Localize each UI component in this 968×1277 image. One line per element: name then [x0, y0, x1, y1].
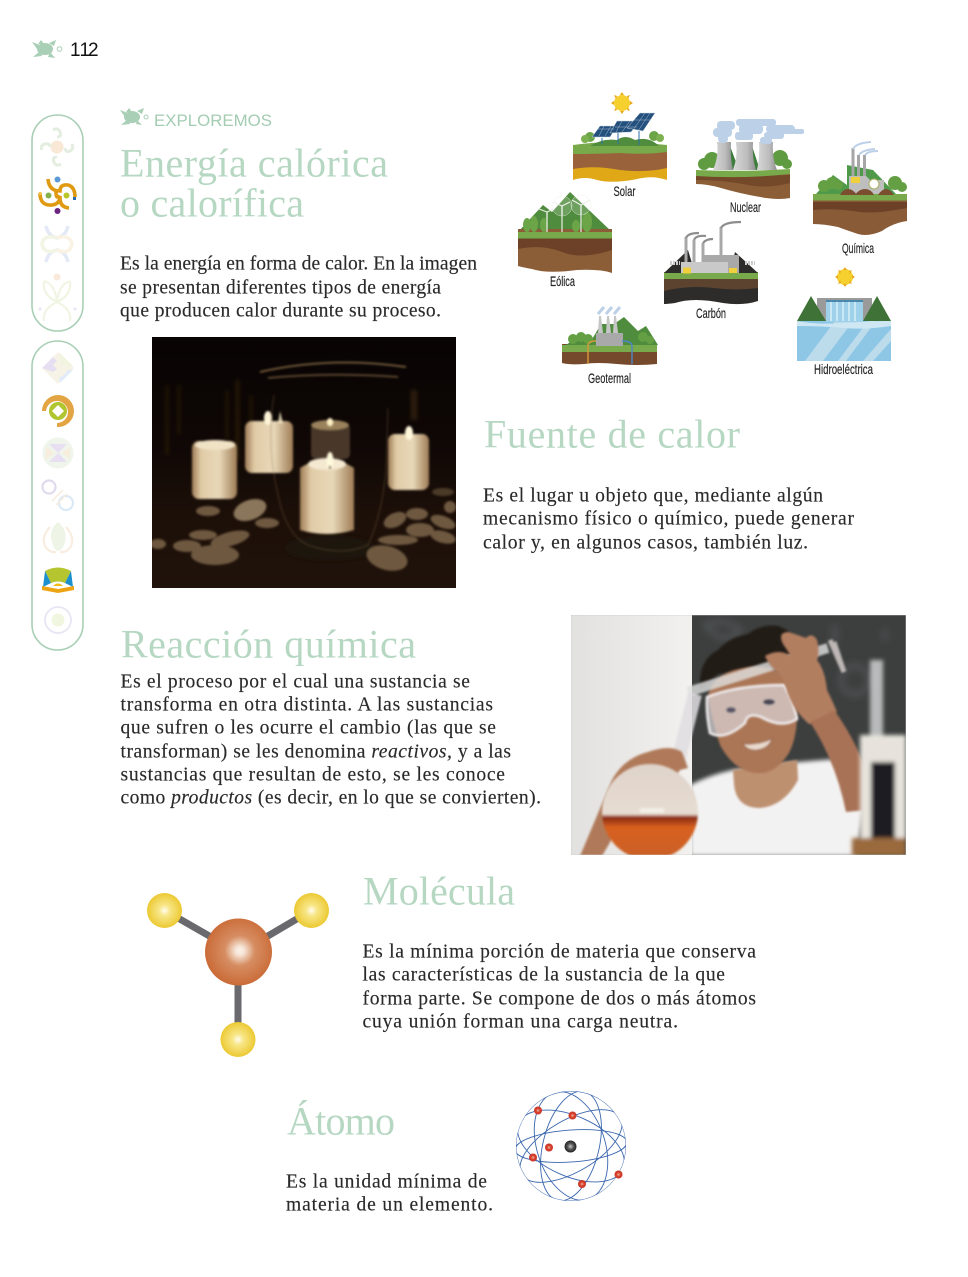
island: solar: Solar — [614, 183, 636, 199]
text block: molécula definition: las características de la sustancia de la que — [362, 964, 725, 986]
text block: reacción definition: como productos (es decir, en lo que se convierten). — [120, 788, 541, 808]
neck — [733, 760, 798, 808]
glass rim — [260, 363, 406, 551]
text block: reacción definition: sustancias que resultan de esto, se les conoce — [120, 764, 505, 786]
island: eólica: Eólica — [550, 273, 575, 289]
heading: molécula: Molécula — [363, 868, 515, 914]
electrons — [529, 1106, 622, 1188]
island: solar — [573, 92, 667, 199]
atom: bottom — [220, 1022, 256, 1057]
section label: exploremos — [120, 108, 272, 130]
face — [708, 667, 797, 773]
icon: colored book fan — [42, 568, 74, 593]
text block: fuente definition: calor y, en algunos casos, también luz. — [483, 532, 808, 554]
atom: top right — [294, 893, 329, 928]
icon: orange ring — [42, 395, 74, 427]
candle: right — [388, 426, 429, 490]
icon: faded leaves — [38, 274, 76, 321]
bonds — [164, 910, 312, 1040]
petals — [150, 488, 457, 575]
text block: energía definition: que producen calor durante su proceso. — [120, 300, 441, 322]
icon: frog — [120, 108, 148, 125]
text block: fuente definition: Es el lugar u objeto que, mediante algún — [483, 486, 823, 506]
sidebar pill: top group — [32, 115, 83, 331]
island: carbón: Carbón — [696, 305, 726, 321]
icon: faded lotus — [44, 522, 72, 552]
text block: reacción definition — [120, 672, 541, 808]
heading: energía calórica: Energía calórica — [120, 140, 388, 186]
text block: átomo definition: Es la unidad mínima de — [286, 1172, 487, 1192]
icon: frog — [32, 40, 62, 58]
central atom — [205, 918, 272, 986]
photo: girl with chemistry flask — [571, 615, 906, 860]
foreground lab glass — [852, 660, 906, 856]
sidebar pill: bottom group — [32, 341, 83, 650]
text block: molécula definition: forma parte. Se compone de dos o más átomos — [362, 988, 756, 1010]
text block: fuente definition — [483, 486, 854, 554]
diagram: energy sources — [518, 92, 907, 386]
heading: reacción química: Reacción química — [121, 622, 416, 666]
island: hidroeléctrica: Hidroeléctrica — [814, 361, 873, 377]
icon: faded splash circle — [45, 607, 71, 633]
page number with frog mark — [32, 40, 99, 61]
candle: left — [192, 440, 237, 499]
heading: fuente de calor: Fuente de calor — [484, 412, 740, 456]
nucleus — [564, 1140, 576, 1152]
flask — [602, 764, 698, 860]
island: nuclear: Nuclear — [730, 199, 761, 215]
heading: energía calórica: o calorífica — [120, 180, 304, 226]
label text: EXPLOREMOS — [154, 111, 272, 130]
photo: candles — [150, 336, 457, 588]
atom: top left — [147, 893, 182, 928]
glass tube — [678, 640, 844, 762]
island: eólica — [518, 192, 612, 289]
text block: átomo definition: materia de un elemento. — [286, 1194, 493, 1216]
text block: reacción definition: Es el proceso por el cual una sustancia se — [120, 672, 470, 692]
raised hand and forearm — [765, 632, 870, 812]
text block: átomo definition — [286, 1172, 493, 1216]
candle: dim centre back — [311, 418, 350, 459]
text block: energía definition: se presentan diferentes tipos de energía — [120, 278, 441, 298]
island: química — [813, 142, 907, 256]
heading: átomo: Átomo — [287, 1098, 395, 1144]
candle: front in glass — [300, 452, 354, 534]
text block: fuente definition: mecanismo físico o químico, puede generar — [483, 508, 854, 530]
text block: reacción definition: transforma en otra distinta. A las sustancias — [120, 694, 493, 716]
icon: faded square in circle — [42, 438, 74, 468]
text block: reacción definition: transforman) se les denomina reactivos, y a las — [120, 742, 511, 762]
orbits — [516, 1091, 626, 1201]
icon: faded rings — [42, 480, 73, 510]
page number: 112 — [70, 40, 99, 61]
goggles — [707, 685, 797, 735]
text block: energía definition: Es la energía en forma de calor. En la imagen — [120, 254, 477, 274]
icon: faded interlocked arcs — [42, 226, 72, 262]
candle: back — [245, 411, 293, 473]
icon: faded diamond — [42, 352, 74, 384]
arm and hand holding flask — [580, 748, 688, 856]
icon: faded sun with swirls — [41, 129, 73, 165]
hair — [699, 624, 790, 684]
island: geotermal — [562, 307, 658, 386]
island: química: Química — [842, 240, 874, 256]
island: geotermal: Geotermal — [588, 370, 631, 386]
text block: energía definition — [120, 254, 477, 322]
island: carbón — [664, 222, 758, 321]
text block: molécula definition — [362, 942, 756, 1032]
mouth — [743, 739, 772, 750]
island: nuclear — [696, 119, 804, 215]
shirt — [690, 758, 868, 856]
text block: molécula definition: Es la mínima porción de materia que conserva — [362, 942, 756, 962]
text block: reacción definition: que sufren o les ocurre el cambio (las que se — [120, 718, 496, 738]
illustration: molecule — [147, 893, 329, 1057]
icon: orange active knot — [39, 176, 76, 214]
text block: molécula definition: cuya unión forman una carga neutra. — [362, 1012, 678, 1032]
island: hidroeléctrica — [797, 267, 891, 377]
illustration: atom — [516, 1091, 626, 1201]
